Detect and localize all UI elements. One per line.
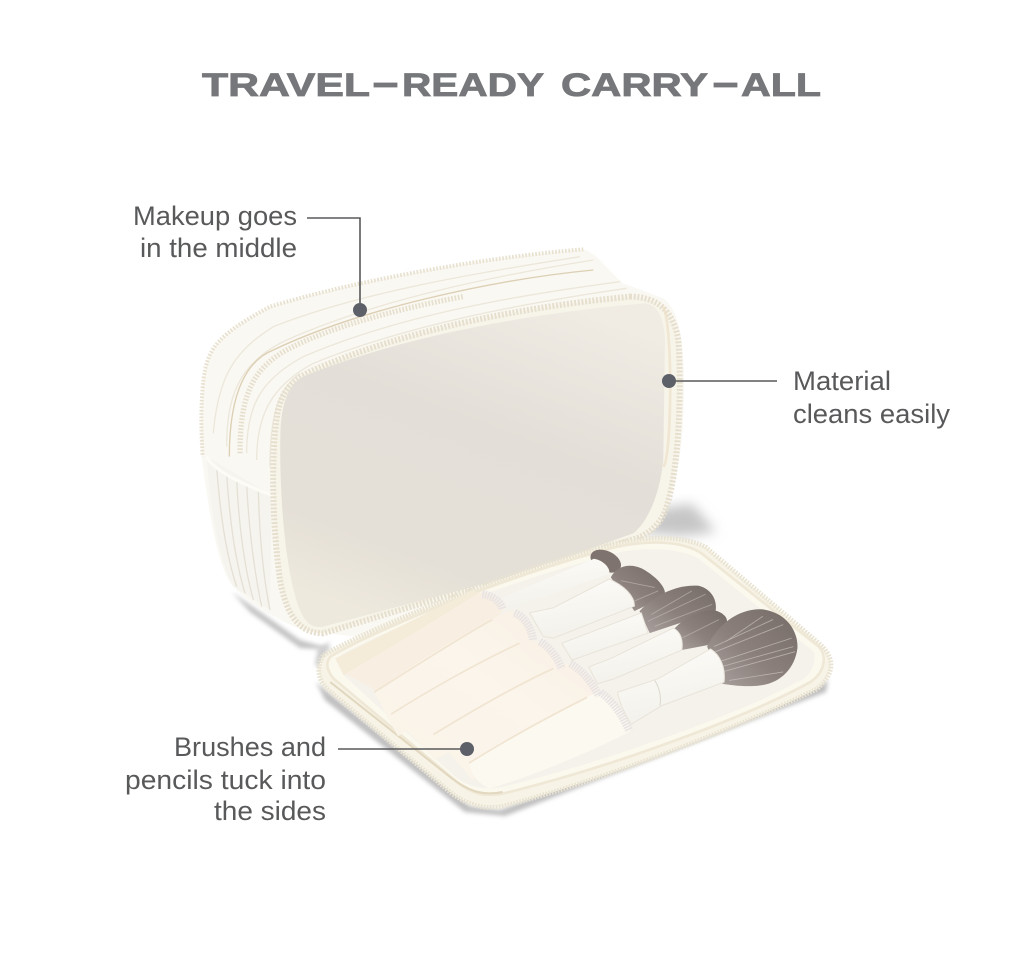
label text: in the middle — [140, 233, 297, 263]
outer zipper teeth — [201, 249, 583, 457]
pouch body — [201, 249, 684, 637]
product illustration: open pouch — [201, 249, 831, 816]
pocket 5 — [469, 692, 631, 789]
brush 4 — [589, 610, 727, 684]
tray lining edge — [327, 542, 824, 795]
label text: pencils tuck into — [125, 765, 326, 795]
callout: brushes and pencils — [125, 732, 474, 826]
label text: Material — [793, 366, 891, 396]
open tray of pouch — [319, 538, 831, 807]
callout: material cleans easily — [662, 366, 951, 429]
tan inner seam — [330, 682, 503, 793]
pocket creases — [374, 620, 587, 763]
quilted side stripes — [213, 257, 627, 467]
brush hair texture — [621, 581, 719, 638]
marker dot — [460, 742, 474, 756]
label text — [125, 732, 326, 826]
pocket 4 — [433, 664, 601, 780]
shadows beneath the pouch — [232, 504, 828, 816]
leader line — [338, 748, 469, 750]
title: TRAVEL — [202, 67, 370, 103]
leader line — [669, 380, 777, 382]
title: ALL — [741, 67, 821, 103]
closed half of pouch — [201, 249, 684, 637]
label text: Makeup goes — [133, 201, 297, 231]
centre zipper seam — [229, 270, 593, 457]
marker dot — [662, 374, 676, 388]
brush 5 — [618, 609, 797, 724]
pocket 2 — [374, 611, 533, 736]
brush 1 — [503, 545, 625, 609]
title: CARRY — [561, 67, 708, 103]
tray outer zipper — [319, 538, 831, 807]
title — [202, 67, 821, 103]
front panel teeth — [273, 297, 680, 633]
label text: the sides — [214, 796, 326, 826]
marker dot — [353, 303, 367, 317]
label text: cleans easily — [793, 399, 951, 429]
right shadowed edge — [663, 307, 670, 467]
callout: makeup goes in the middle — [133, 201, 367, 317]
brush 2 — [530, 566, 665, 638]
label text — [793, 366, 951, 429]
pocket 3 — [391, 641, 564, 760]
satin back lining — [335, 549, 814, 788]
lower side gusset — [207, 457, 272, 610]
front panel surface — [280, 303, 665, 627]
label text: Brushes and — [174, 732, 326, 762]
label text — [133, 201, 297, 263]
leader line — [307, 218, 360, 310]
brush 3 — [562, 586, 716, 660]
gathered elastic bands — [482, 594, 629, 731]
pocket 1 — [345, 592, 503, 699]
title: READY — [402, 67, 544, 103]
